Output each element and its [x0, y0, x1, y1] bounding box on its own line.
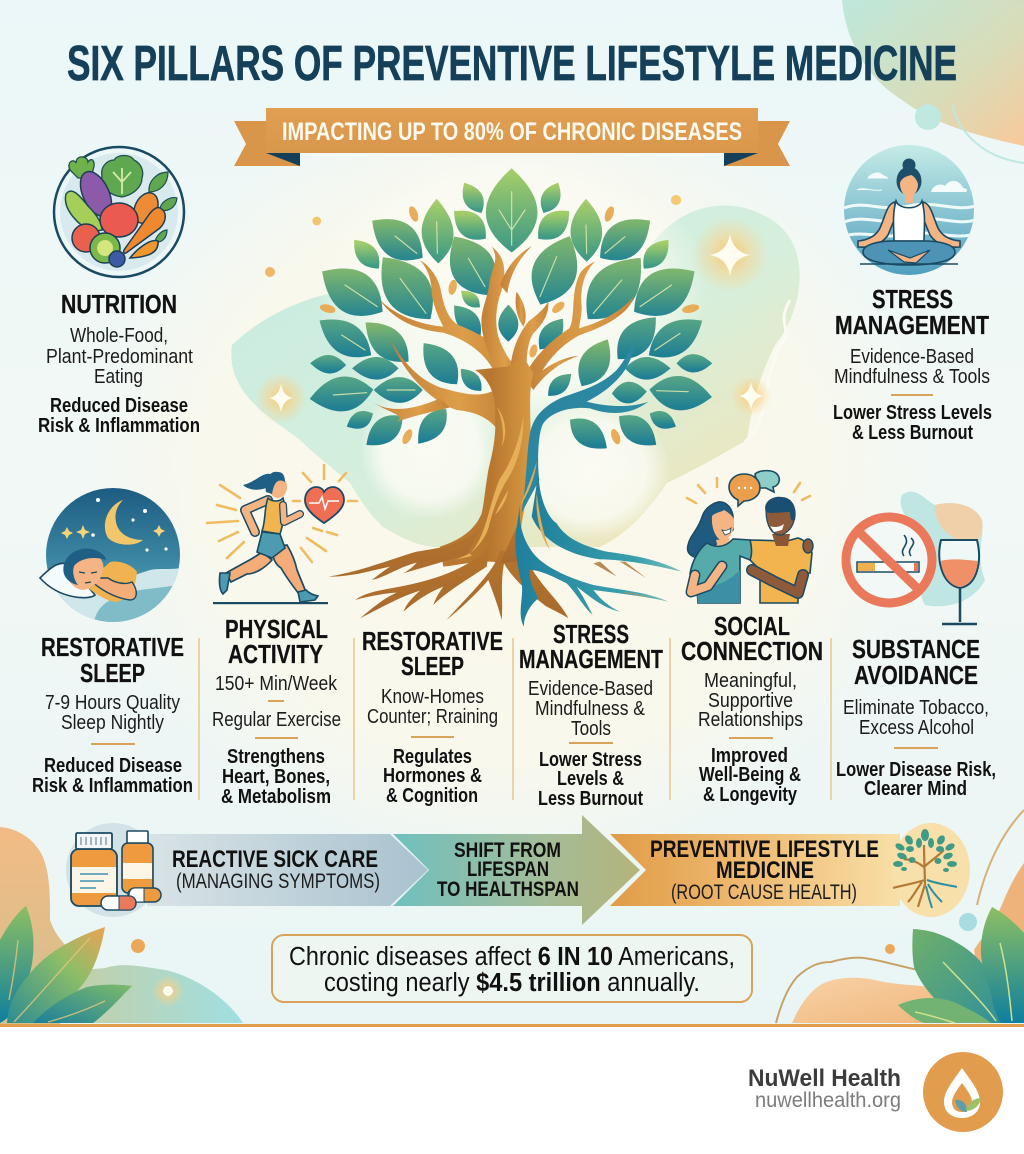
panel: social connection: [681, 471, 823, 806]
arrow text: (MANAGING SYMPTOMS): [176, 870, 380, 893]
decoration: top right blob: [842, 0, 1024, 163]
description: Relationships: [698, 709, 803, 731]
footer brand text: NuWell Health: [748, 1065, 901, 1092]
heading: [362, 626, 503, 681]
benefit: [383, 746, 482, 807]
benefit: Well-Being &: [699, 764, 801, 786]
benefit: Heart, Bones,: [222, 766, 330, 788]
arrow text: (ROOT CAUSE HEALTH): [671, 881, 857, 904]
decoration: soft blob behind tree: [231, 140, 800, 547]
callout text: costing nearly $4.5 trillion annually.: [324, 969, 700, 997]
description: [843, 697, 989, 739]
benefit: & Longevity: [703, 784, 798, 806]
arrow text: MEDICINE: [716, 857, 814, 884]
panel: nutrition: [38, 147, 200, 437]
arrow text: [650, 836, 879, 904]
decoration: bottom left foliage: [0, 827, 243, 1024]
heading: SOCIAL: [714, 611, 790, 641]
icon: sleeping person: [40, 488, 180, 622]
heading: NUTRITION: [61, 289, 177, 319]
arrow text: [437, 839, 579, 901]
tree: [312, 172, 708, 627]
icon: logo: [923, 1052, 1003, 1132]
description: Counter; Rraining: [367, 706, 498, 728]
tree branches: [372, 246, 633, 433]
icon: two friends: [687, 471, 813, 603]
description: [698, 670, 803, 731]
benefit: Less Burnout: [538, 788, 643, 810]
panel: restorative sleep center: [362, 626, 503, 807]
brown roots: [328, 527, 568, 620]
heading: [225, 614, 328, 669]
heading: STRESS: [872, 284, 953, 314]
description: Eliminate Tobacco,: [843, 697, 989, 719]
benefit: [38, 395, 200, 437]
benefit: Clearer Mind: [864, 778, 967, 800]
footer panel: [0, 1024, 1024, 1154]
arrow: preventive lifestyle medicine: [610, 823, 970, 917]
benefit: [836, 759, 996, 800]
heading: RESTORATIVE: [41, 632, 184, 662]
panel: stress management center: [519, 619, 663, 810]
footer brand text: [748, 1065, 901, 1112]
icon: small tree: [893, 829, 957, 908]
heading: PHYSICAL: [225, 614, 328, 644]
description: Sleep Nightly: [61, 712, 164, 734]
benefit: Improved: [711, 745, 788, 767]
icon: sparkles: [255, 195, 771, 424]
benefit: Lower Disease Risk,: [836, 759, 996, 781]
arrow text: REACTIVE SICK CARE: [172, 846, 378, 873]
description: Meaningful,: [704, 670, 797, 692]
description: Plant-Predominant: [46, 346, 193, 368]
callout text: [289, 943, 735, 997]
benefit: & Less Burnout: [852, 422, 973, 444]
heading: SUBSTANCE: [852, 634, 980, 664]
tree trunk: [440, 357, 533, 567]
arrow text: PREVENTIVE LIFESTYLE: [650, 836, 879, 863]
heading: [519, 619, 663, 674]
icon: vegetable plate: [54, 147, 184, 277]
benefit: Reduced Disease: [44, 755, 182, 777]
description: [367, 686, 498, 728]
benefit: [538, 749, 643, 810]
heading: ACTIVITY: [228, 639, 323, 669]
description: Tools: [571, 718, 611, 740]
icon: no smoking and wine glass: [846, 492, 985, 624]
teal roots: [515, 462, 682, 627]
orange small leaves: [312, 195, 700, 446]
arrow text: SHIFT FROM: [454, 839, 561, 862]
arrow: reactive sick care: [66, 823, 428, 917]
arrow text: [172, 846, 380, 893]
description: 7-9 Hours Quality: [45, 692, 180, 714]
description: Evidence-Based: [850, 346, 974, 368]
description: Evidence-Based: [528, 678, 653, 700]
heading: STRESS: [553, 619, 629, 649]
benefit: Hormones &: [383, 765, 482, 787]
heading: [681, 611, 823, 666]
teal branch: [521, 340, 648, 513]
arrow: shift: [393, 815, 640, 925]
description: [46, 325, 193, 388]
benefit: Risk & Inflammation: [32, 775, 193, 797]
description: [45, 692, 180, 734]
heading: MANAGEMENT: [835, 310, 989, 340]
arrow text: LIFESPAN: [467, 858, 549, 881]
heading: CONNECTION: [681, 636, 823, 666]
benefit: [699, 745, 801, 806]
benefit: [833, 402, 992, 444]
callout text: Chronic diseases affect 6 IN 10 Americans,: [289, 943, 735, 971]
benefit: & Cognition: [386, 785, 478, 807]
description: Supportive: [708, 690, 793, 712]
leaf veins: [333, 192, 688, 395]
benefit: Levels &: [557, 768, 624, 790]
description: [528, 678, 653, 740]
benefit: Regulates: [393, 746, 472, 768]
icon: medicine bottles: [66, 823, 161, 917]
description: Mindfulness & Tools: [834, 366, 990, 388]
heading: MANAGEMENT: [519, 644, 663, 674]
heading: SLEEP: [80, 658, 145, 688]
description: 150+ Min/Week: [215, 673, 338, 695]
benefit: Reduced Disease: [50, 395, 188, 417]
footer brand text: nuwellhealth.org: [755, 1089, 901, 1112]
benefit: [221, 746, 331, 808]
heading: AVOIDANCE: [854, 660, 978, 690]
panel: stress management top: [833, 145, 992, 444]
arrow text: TO HEALTHSPAN: [437, 878, 579, 901]
description: Eating: [94, 366, 143, 388]
column dividers: [198, 638, 832, 800]
icon: meditation: [844, 145, 975, 275]
tree leaves: [313, 172, 708, 446]
benefit: Lower Stress Levels: [833, 402, 992, 424]
banner: [234, 108, 790, 166]
icon: runner: [207, 465, 357, 604]
heading: [41, 632, 184, 688]
heading: [852, 634, 980, 690]
benefit: Lower Stress: [539, 749, 642, 771]
description: Mindfulness &: [535, 698, 646, 720]
description: [834, 346, 990, 388]
benefit: Risk & Inflammation: [38, 415, 200, 437]
heading: RESTORATIVE: [362, 626, 503, 656]
benefit: & Metabolism: [221, 786, 331, 808]
trunk highlights: [457, 407, 523, 559]
benefit: Strengthens: [227, 746, 325, 768]
benefit: [32, 755, 193, 797]
heading: SLEEP: [401, 651, 464, 681]
description: Regular Exercise: [212, 709, 341, 731]
decoration: bottom right foliage: [776, 810, 1024, 1023]
panel: physical activity: [207, 465, 357, 808]
description: Excess Alcohol: [859, 717, 974, 739]
heading: [835, 284, 989, 340]
panel: restorative sleep: [32, 488, 193, 797]
banner text: IMPACTING UP TO 80% OF CHRONIC DISEASES: [282, 118, 742, 146]
panel: substance avoidance: [836, 492, 996, 800]
description: Whole-Food,: [70, 325, 168, 347]
callout: statistics: [272, 935, 752, 1002]
description: Know-Homes: [381, 686, 484, 708]
description: [212, 673, 341, 731]
